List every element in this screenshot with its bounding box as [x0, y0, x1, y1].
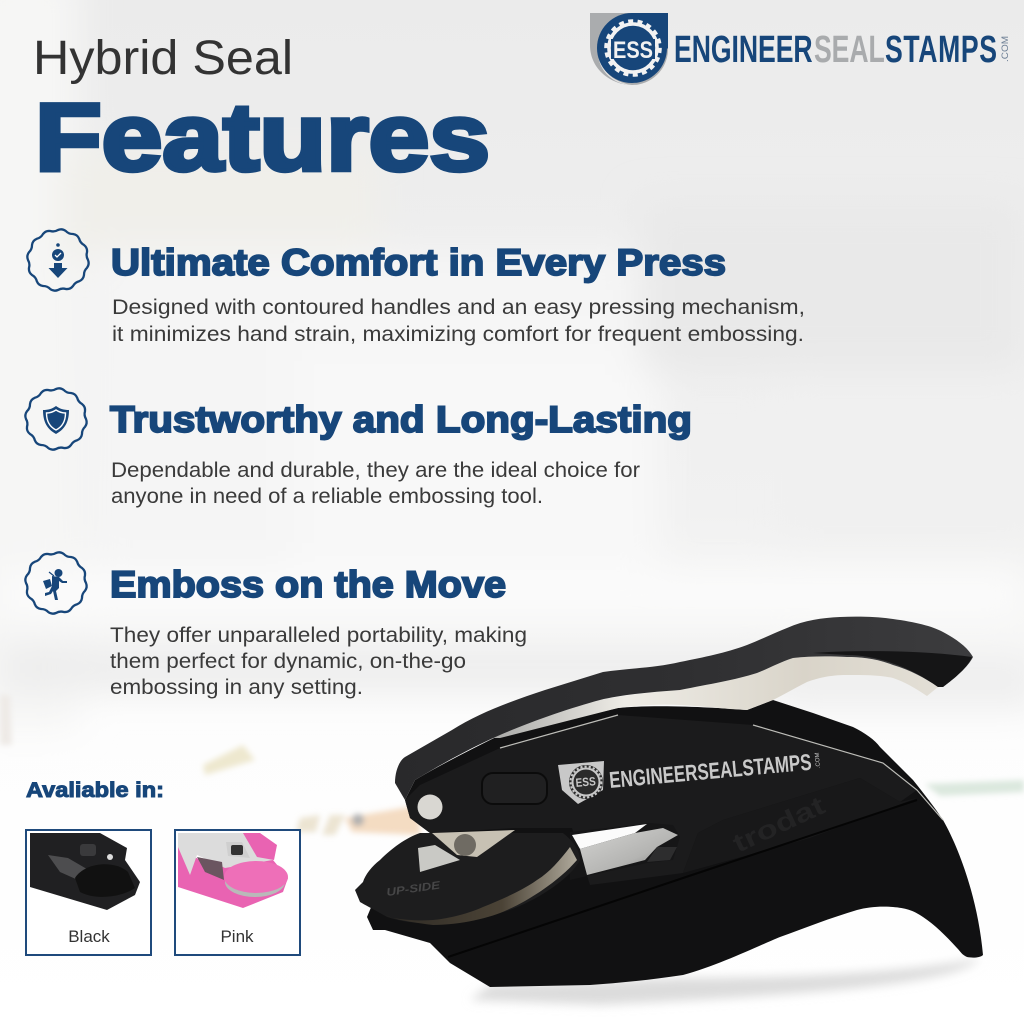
logo shield: ESS — [613, 37, 653, 64]
feature 3: Emboss on the Move — [25, 552, 527, 699]
heading: Trustworthy and Long-Lasting — [110, 399, 692, 440]
logo wordmark: ENGINEER — [674, 27, 813, 70]
feature 1: Ultimate Comfort in Every Press — [27, 229, 805, 346]
chrome die window — [418, 845, 460, 872]
engraved logo mark: ESS — [575, 774, 596, 790]
upper arm face — [405, 715, 917, 885]
thumbnail: pink stamp — [178, 847, 288, 908]
logo wordmark: SEAL — [814, 27, 885, 70]
base seam — [448, 800, 917, 957]
icon: running person with briefcase — [25, 552, 87, 614]
product photo: black hybrid embosser — [355, 617, 983, 1005]
slider lock — [482, 773, 547, 804]
engraved logo mark — [558, 761, 604, 804]
chrome window — [570, 823, 680, 880]
moulded brand text: trodat — [728, 790, 830, 858]
logo wordmark: .COM — [1000, 36, 1011, 62]
engraved domain suffix: .COM — [815, 752, 822, 768]
body and base silhouette — [367, 700, 983, 987]
ground shadow — [470, 958, 980, 1005]
silver lever — [490, 656, 938, 738]
heading: Emboss on the Move — [110, 564, 506, 605]
body text: Dependable and durable, they are the ideal choice for — [111, 459, 640, 482]
engraved wordmark: ENGINEERSEALSTAMPS — [608, 749, 813, 793]
top handle grip — [395, 617, 973, 800]
logo wordmark — [674, 27, 1011, 70]
logo wordmark: STAMPS — [885, 27, 997, 70]
body text: embossing in any setting. — [110, 676, 363, 699]
body text: it minimizes hand strain, maximizing comfort for frequent embossing. — [112, 323, 804, 346]
body text: Designed with contoured handles and an easy pressing mechanism, — [112, 296, 805, 319]
heading: Ultimate Comfort in Every Press — [111, 242, 726, 283]
die rim — [385, 847, 577, 925]
body text: They offer unparalleled portability, making — [110, 624, 527, 647]
side panel — [683, 778, 917, 873]
arm chrome strips — [500, 715, 943, 820]
label: Black — [68, 927, 110, 946]
logo shield — [590, 13, 668, 85]
body text: anyone in need of a reliable embossing tool. — [111, 485, 543, 508]
logo: Engineer Seal Stamps — [590, 13, 1011, 85]
icon: pressing arrow with check — [27, 229, 89, 291]
thumbnail: black stamp — [30, 833, 140, 910]
title: Hybrid Seal: Hybrid Seal — [33, 32, 293, 85]
label: Pink — [220, 927, 254, 946]
die label text: UP-SIDE — [386, 879, 442, 899]
body text — [112, 296, 805, 346]
icon: shield — [25, 388, 87, 450]
handle dark tip facet — [813, 651, 972, 687]
upper die disk — [355, 833, 580, 924]
feature 2: Trustworthy and Long-Lasting — [25, 388, 692, 508]
title: Features: Features — [35, 84, 490, 191]
heading: Available colours: Avaliable in: — [26, 779, 164, 802]
body text — [110, 624, 527, 699]
colour option: Pink — [175, 830, 300, 955]
body text — [111, 459, 640, 508]
pivot pin — [418, 794, 442, 820]
body text: them perfect for dynamic, on-the-go — [110, 650, 466, 673]
colour option: Black — [26, 830, 151, 955]
centre mechanism — [432, 830, 515, 857]
